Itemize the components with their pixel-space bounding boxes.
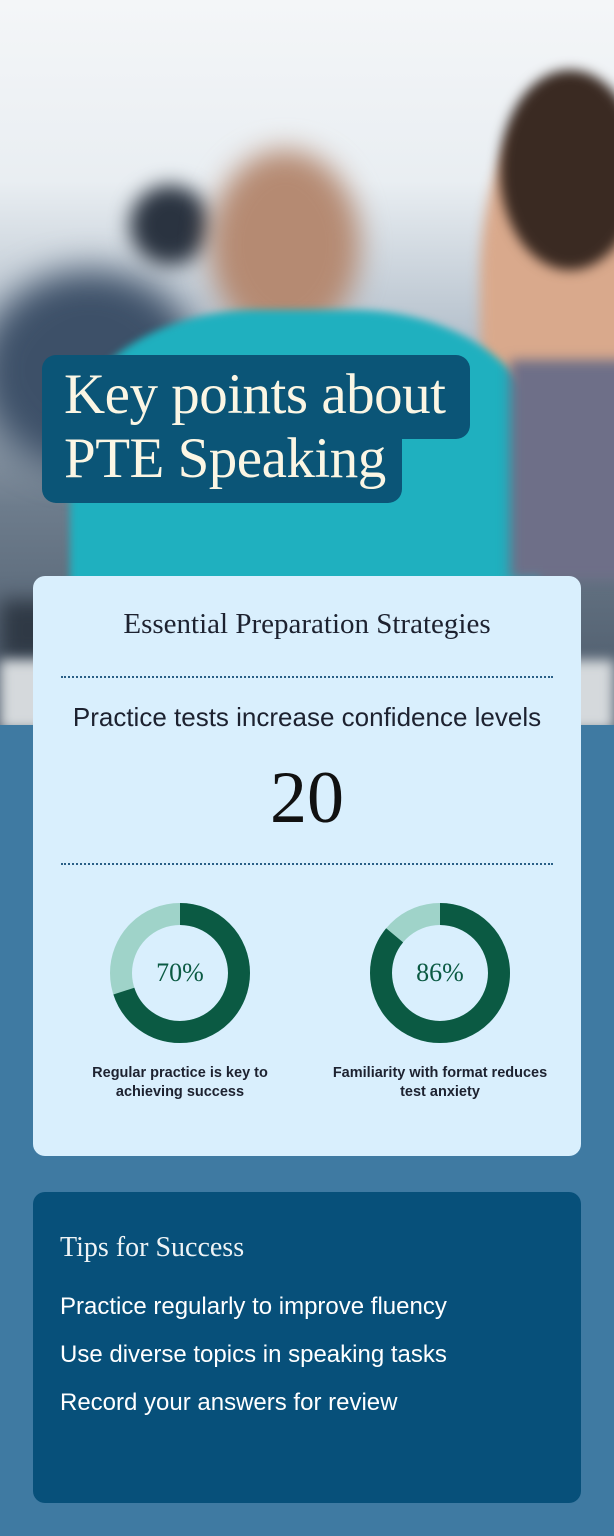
- tips list: Practice regularly to improve fluency: [60, 1293, 447, 1320]
- donut chart: 86%: 86%: [416, 958, 464, 987]
- panel: essential preparation strategies: [33, 576, 581, 1156]
- tips list: Use diverse topics in speaking tasks: [60, 1341, 447, 1368]
- donut chart: 86%: Familiarity with format reduces test anxiety: [333, 1065, 547, 1100]
- panel: tips for success: [33, 1192, 581, 1503]
- tips list: Record your answers for review: [60, 1389, 397, 1416]
- big number: 20: [270, 757, 344, 839]
- title: PTE Speaking: [64, 427, 386, 490]
- heading: Essential Preparation Strategies: [123, 608, 491, 640]
- stat text: Practice tests increase confidence levels: [73, 702, 541, 732]
- tips list: [60, 1293, 447, 1416]
- donut chart: 70%: [92, 903, 268, 1100]
- donut chart: 70%: 70%: [156, 958, 204, 987]
- donut chart: 70%: Regular practice is key to achieving success: [92, 1065, 268, 1100]
- tips heading: Tips for Success: [60, 1232, 244, 1263]
- title: [42, 355, 470, 503]
- background photo (approximated): [0, 0, 614, 725]
- title: Key points about: [64, 363, 445, 426]
- donut chart: 86%: [333, 903, 547, 1100]
